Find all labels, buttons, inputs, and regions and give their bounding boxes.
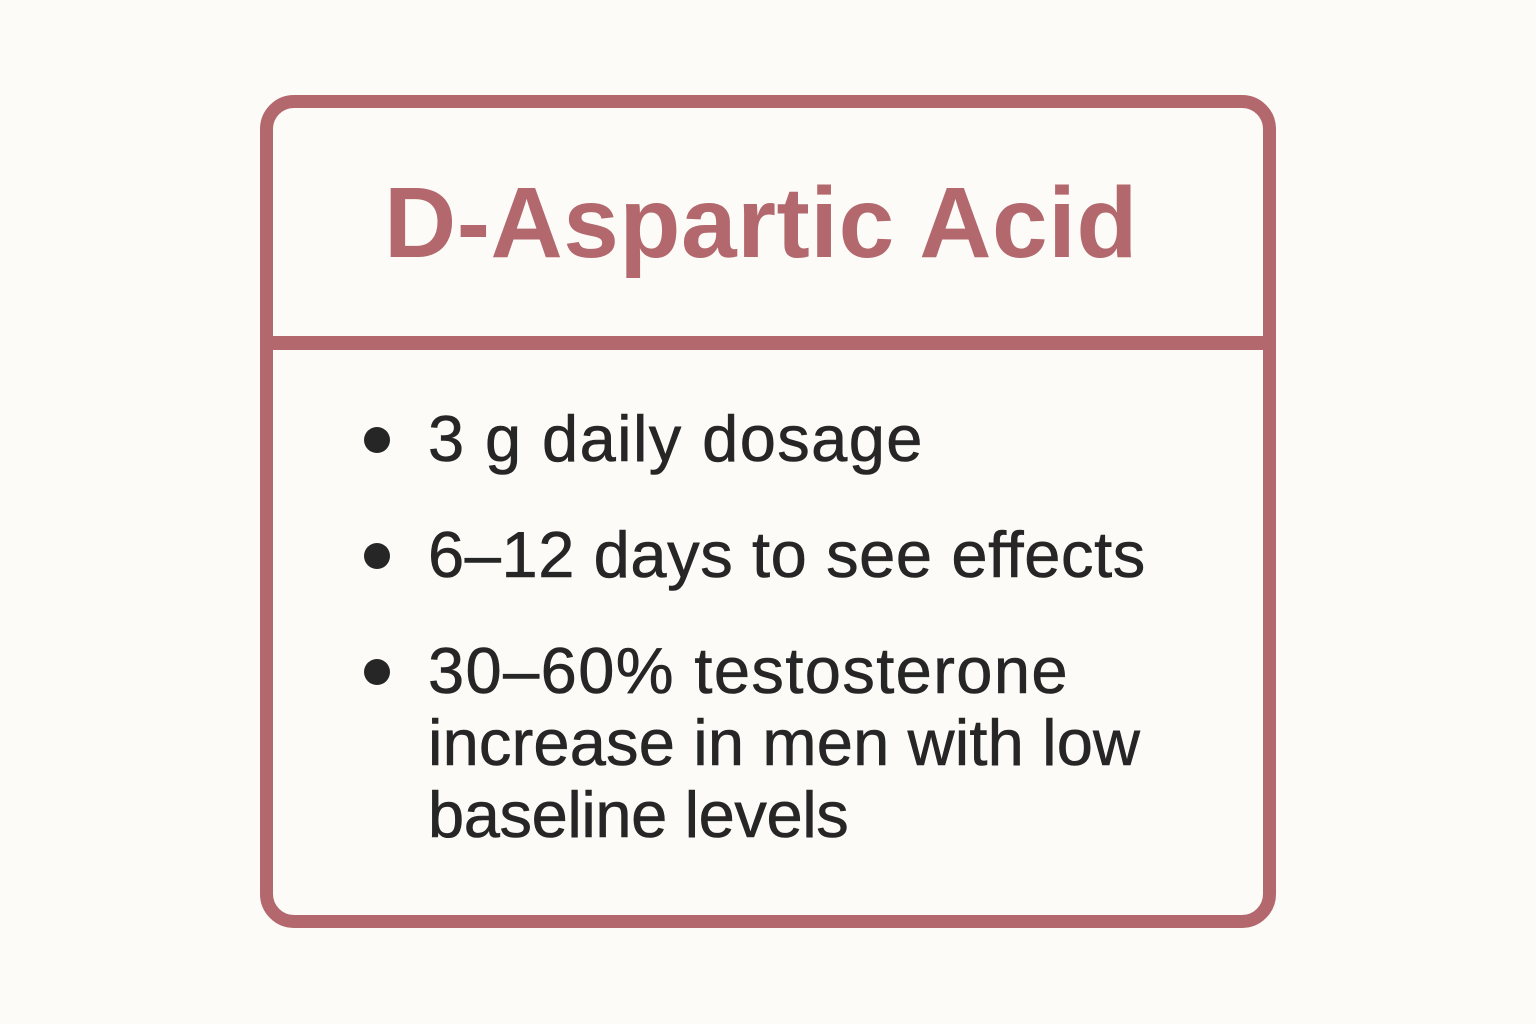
bullet 3 text: 30–60% testosterone: [428, 634, 1069, 707]
bullet 3 text: baseline levels: [428, 778, 848, 851]
heading divider: [260, 336, 1276, 350]
bullet 1 marker: [364, 427, 390, 453]
title: D-Aspartic Acid: [384, 167, 1138, 279]
card border: [260, 95, 1276, 928]
bullet 3 marker: [364, 659, 390, 685]
bullet 1 text: 3 g daily dosage: [428, 402, 924, 475]
bullet 3 text: increase in men with low: [428, 706, 1140, 779]
bullet 2 marker: [364, 543, 390, 569]
bullet 3 text: [428, 634, 1140, 851]
bullet 2 text: 6–12 days to see effects: [428, 518, 1146, 591]
panel: D-Aspartic Acid card: [260, 95, 1276, 928]
